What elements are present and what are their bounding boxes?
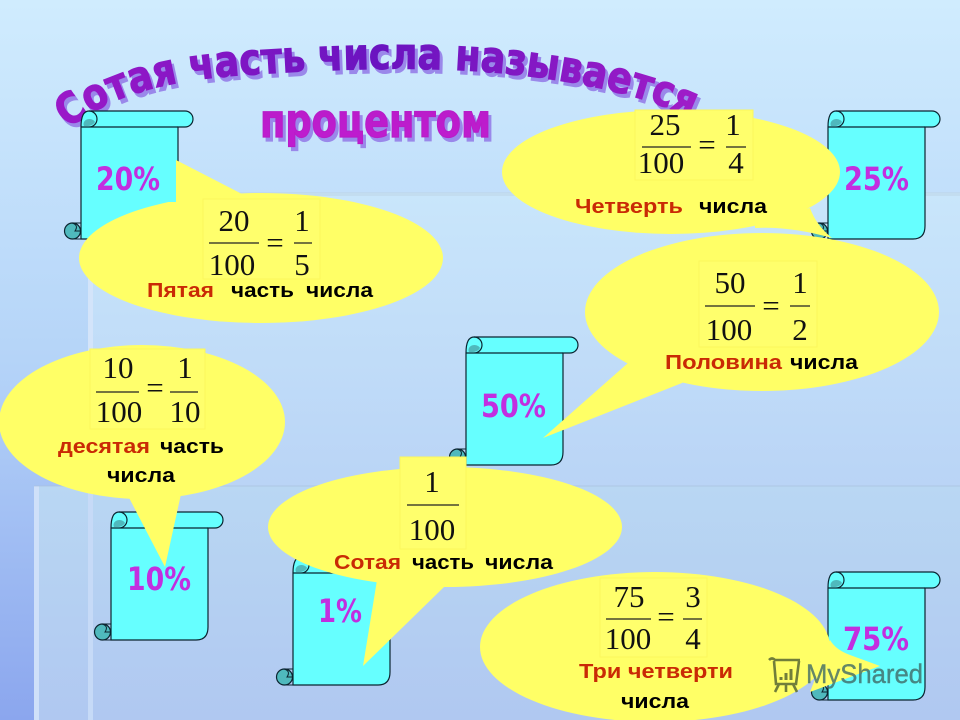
callout: 25 percent — [502, 107, 840, 238]
title: процентом — [260, 94, 491, 148]
title: процентом — [263, 98, 494, 152]
formula: 50/100 = 1/2: 50 — [714, 265, 746, 300]
formula: 25/100 = 1/4: 25 — [650, 107, 680, 142]
label: 1%: 1% — [318, 592, 362, 630]
scroll: 10% — [94, 512, 223, 640]
formula: 75/100 = 3/4: 4 — [685, 621, 701, 656]
callout: 1 percent — [268, 457, 622, 666]
scroll: 75% — [812, 572, 940, 700]
formula: 25/100 = 1/4: 4 — [728, 145, 744, 180]
scroll: 20% — [64, 111, 193, 239]
formula: 10/100 = 1/10: 10 — [102, 350, 134, 385]
watermark: MyShared: MyShared — [806, 659, 923, 689]
formula: 25/100 = 1/4: 100 — [638, 145, 684, 180]
caption: Пятая часть числа — [147, 279, 374, 302]
caption: Сотая часть числа — [334, 551, 554, 574]
formula: 50/100 = 1/2: = — [762, 288, 780, 323]
caption: Половина числа — [665, 351, 859, 374]
scroll: 1% — [276, 557, 405, 685]
label: 75%: 75% — [843, 620, 909, 658]
caption: десятая часть числа: часть — [160, 435, 224, 458]
formula: 75/100 = 3/4: = — [657, 599, 675, 634]
caption: Три четверти числа — [579, 660, 733, 713]
caption: Четверть числа: Четверть — [575, 195, 683, 218]
callout: 50 percent — [543, 233, 939, 438]
formula: 20/100 = 1/5: 20 — [218, 203, 250, 238]
caption: десятая часть числа — [58, 435, 224, 487]
caption: Три четверти числа: Три четверти — [579, 660, 733, 683]
caption: Пятая часть числа: Пятая — [147, 279, 214, 302]
formula: 25/100 = 1/4: 1 — [725, 107, 741, 142]
watermark: MyShared — [769, 658, 923, 692]
formula: 10/100 = 1/10: = — [146, 370, 164, 405]
formula: 10/100 = 1/10: 1 — [177, 350, 193, 385]
formula: 20/100 = 1/5 — [203, 199, 320, 282]
caption: Сотая часть числа: часть — [412, 551, 474, 574]
formula: 1/100: 100 — [409, 512, 455, 547]
label: 50%: 50% — [481, 387, 546, 425]
caption: Три четверти числа: числа — [621, 690, 690, 713]
formula: 50/100 = 1/2: 1 — [792, 265, 808, 300]
formula: 50/100 = 1/2: 100 — [706, 312, 752, 347]
caption: Пятая часть числа: числа — [306, 279, 374, 302]
formula: 25/100 = 1/4: = — [698, 127, 716, 162]
formula: 1/100 — [400, 457, 466, 549]
formula: 20/100 = 1/5: = — [266, 225, 284, 260]
caption: Половина числа: числа — [790, 351, 859, 374]
formula: 20/100 = 1/5: 100 — [209, 247, 255, 282]
formula: 75/100 = 3/4: 75 — [614, 579, 644, 614]
formula: 50/100 = 1/2 — [699, 261, 817, 347]
scroll: 25% — [812, 111, 940, 239]
title: Сотая часть числа называется — [62, 48, 701, 128]
callout: 75 percent — [480, 572, 880, 720]
formula: 10/100 = 1/10 — [90, 349, 205, 429]
title: Сотая часть числа называется — [56, 44, 698, 124]
label: 10%: 10% — [127, 560, 191, 598]
formula: 75/100 = 3/4: 3 — [685, 579, 701, 614]
label: 20%: 20% — [96, 160, 160, 198]
formula: 10/100 = 1/10: 100 — [96, 394, 142, 429]
icon: presentation board — [769, 658, 800, 692]
caption: Сотая часть числа: числа — [485, 551, 554, 574]
caption: десятая часть числа: числа — [107, 464, 176, 487]
formula: 1/100: 1 — [424, 464, 440, 499]
formula: 75/100 = 3/4: 100 — [605, 621, 651, 656]
scroll: 50% — [450, 337, 578, 465]
formula: 20/100 = 1/5: 5 — [294, 247, 310, 282]
caption: Пятая часть числа: часть — [231, 279, 294, 302]
caption: Четверть числа: числа — [699, 195, 768, 218]
formula: 75/100 = 3/4 — [600, 578, 707, 657]
callout: 20 percent — [79, 160, 443, 323]
formula: 20/100 = 1/5: 1 — [294, 203, 310, 238]
caption: десятая часть числа: десятая — [58, 435, 150, 458]
formula: 25/100 = 1/4 — [635, 107, 753, 180]
formula: 10/100 = 1/10: 10 — [170, 394, 200, 429]
caption: Четверть числа — [575, 195, 768, 218]
caption: Половина числа: Половина — [665, 351, 783, 374]
callout: 10 percent — [0, 345, 285, 567]
label: 25%: 25% — [844, 160, 909, 198]
formula: 50/100 = 1/2: 2 — [792, 312, 808, 347]
caption: Сотая часть числа: Сотая — [334, 551, 401, 574]
